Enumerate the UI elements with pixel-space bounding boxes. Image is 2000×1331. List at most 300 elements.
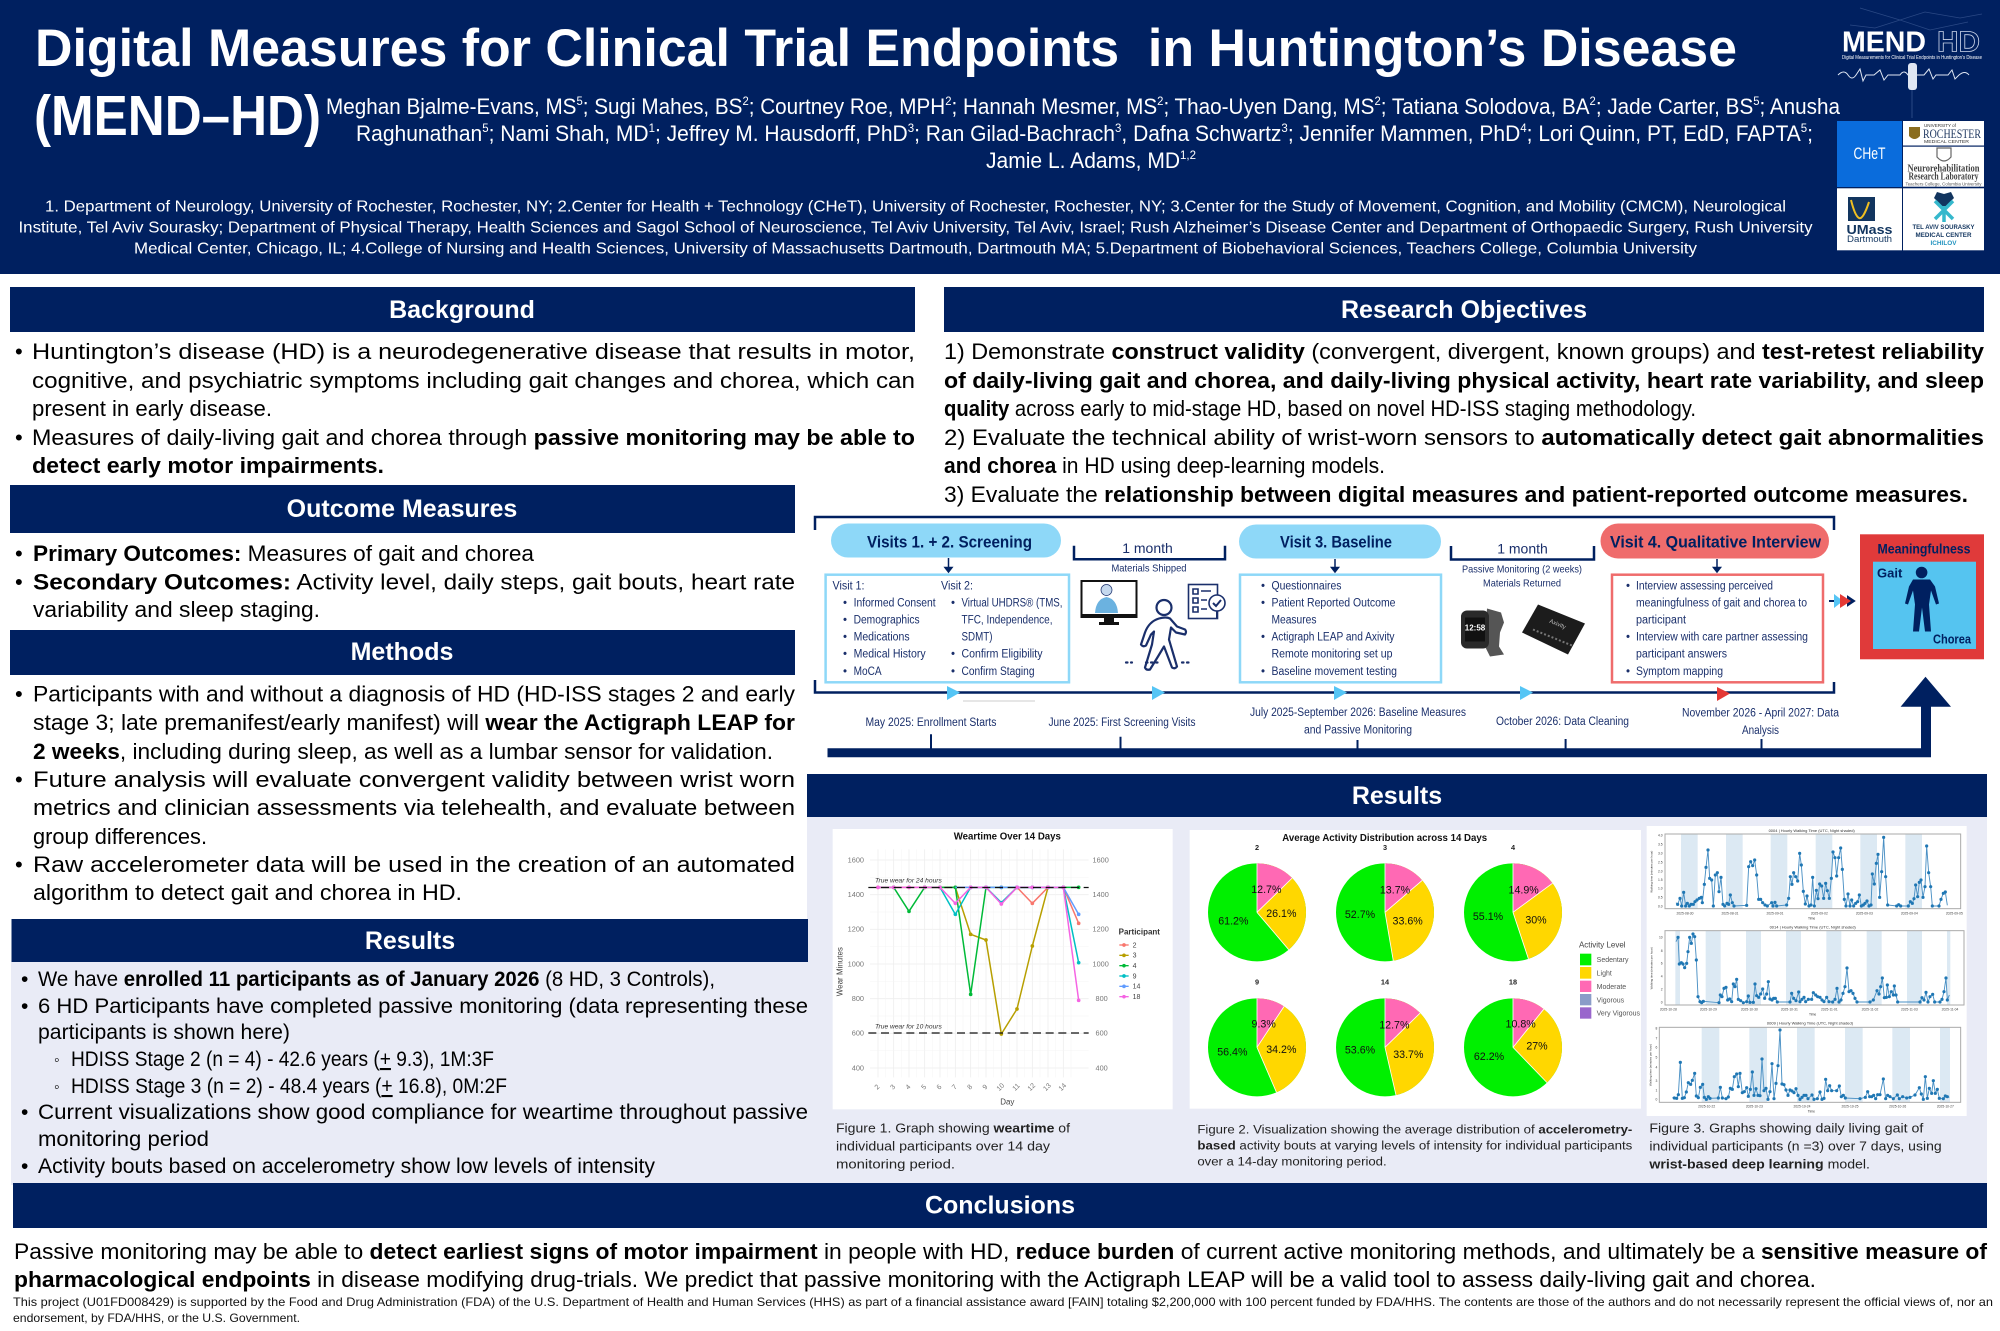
- text: conclusions: Passive monitoring may be able to detect earliest signs of motor impairment in people with HD, reduce burden of current active monitoring methods, and ultimately be a sensitive measure of: [14, 1239, 1988, 1264]
- figure 1 caption: monitoring period.: [836, 1157, 955, 1171]
- heading: results left: Results: [365, 927, 455, 955]
- box: visit 3 baseline: Actigraph LEAP and Axivity: [1272, 632, 1395, 644]
- box: visit 1 and visit 2: •: [843, 598, 847, 610]
- affiliations: 1. Department of Neurology, University of Rochester, Rochester, NY; 2.Center for Health + Technology (CHeT), University of Rochester, Rochester, NY; 3.Center for the Study of Movement, Cognition, and Mobility (CMCM), Neurological: [45, 198, 1786, 216]
- authors: 5: [482, 121, 489, 135]
- icon: Actigraph LEAP watch: [1461, 608, 1504, 656]
- authors: 3: [1281, 121, 1288, 135]
- box: visit 4 interview: •: [1626, 632, 1630, 644]
- box: meaningfulness: Chorea: [1933, 631, 1972, 646]
- box: visit 3 baseline: [1240, 575, 1441, 682]
- chart: participant 0014: 2025-11-03: [1901, 1007, 1918, 1011]
- chart: participant 0014: 10: [1659, 936, 1663, 940]
- chart: participant 0004: 2025-09-02: [1811, 912, 1828, 916]
- chart: participant 0009: 2025-10-23: [1746, 1104, 1763, 1108]
- text: results bullets: ◦: [54, 1079, 60, 1096]
- authors: ; Jade Carter, BS: [1596, 94, 1753, 119]
- figure 1: weartime line chart: 6: [936, 1084, 944, 1091]
- authors: ; Courtney Roe, MPH: [749, 94, 945, 119]
- box: visit 3 baseline: Questionnaires: [1272, 580, 1342, 592]
- authors: 2: [1374, 94, 1381, 108]
- text: objectives: quality across early to mid-stage HD, based on novel HD-ISS staging methodology.: [944, 396, 1696, 421]
- figure 1: weartime line chart: 1200: [1093, 925, 1109, 934]
- figure 1: weartime line chart: 2: [1133, 942, 1137, 949]
- text: objectives: 2) Evaluate the technical ability of wrist-worn sensors to automatically detect gait abnormalities: [944, 425, 1984, 450]
- box: visit 1 and visit 2: [826, 575, 1069, 682]
- chart: participant 0004: 1.0: [1658, 887, 1663, 891]
- footnote: funding: [13, 1295, 1993, 1325]
- pie percentage labels: 62.2%: [1474, 1051, 1505, 1063]
- chart: participant 0004: 0004 | Hourly Walking Time (UTC, Night shaded): [1769, 828, 1855, 833]
- heading: outcome measures: Outcome Measures: [287, 495, 517, 523]
- pie: participant 18: [1464, 998, 1562, 1096]
- chart: participant 0014: 0014 | Hourly Walking Time (UTC, Night shaded): [1770, 924, 1856, 929]
- down arrows: [945, 558, 1720, 572]
- text: results bullets: Activity bouts based on accelerometry show low levels of intensity: [38, 1155, 655, 1178]
- timeline dates: May 2025: Enrollment Starts: [866, 717, 997, 729]
- heading: results left: [12, 919, 808, 962]
- box: visit 3 baseline: Measures: [1272, 615, 1317, 627]
- pie percentage labels: [1217, 884, 1548, 1063]
- pie: participant 14: [1336, 998, 1434, 1096]
- box: visit 4 interview: meaningfulness of gait and chorea to: [1636, 598, 1807, 610]
- text: background bullets: detect early motor impairments.: [32, 453, 384, 478]
- authors: Jamie L. Adams, MD: [986, 148, 1189, 173]
- figure 1: weartime line chart: True wear for 10 hours: [875, 1023, 943, 1030]
- study timeline diagram: [815, 517, 1984, 757]
- chart: participant 0014: 2025-11-02: [1862, 1007, 1879, 1011]
- text: methods bullets: •: [15, 767, 23, 792]
- chart: participant 0009: 2025-10-26: [1889, 1104, 1906, 1108]
- figure 1: weartime line chart: 3: [889, 1084, 897, 1091]
- figure 1: weartime line chart: True wear for 24 hours: [875, 878, 943, 885]
- panel: results left: [12, 919, 808, 1178]
- box: visit 1 and visit 2: •: [843, 632, 847, 644]
- figure 1: weartime line chart: 1400: [848, 890, 864, 899]
- box: visit 3 baseline: •: [1261, 632, 1265, 644]
- figure 1: weartime line chart: 1000: [848, 959, 864, 968]
- text: results bullets: •: [21, 1101, 28, 1124]
- chart: participant 0009: 5: [1655, 1056, 1657, 1060]
- authors: Meghan Bjalme-Evans, MS: [326, 94, 593, 119]
- box: visit 1 and visit 2: •: [951, 666, 955, 678]
- bottom bar and up arrow: [828, 677, 1951, 757]
- bracket: 1 month passive monitoring: Passive Monitoring (2 weeks): [1462, 564, 1582, 576]
- pie legend: Activity Level: [1579, 940, 1626, 949]
- box: visit 1 and visit 2: Medications: [854, 632, 910, 644]
- pill: visit 4: Visit 4. Qualitative Interview: [1610, 533, 1822, 552]
- heading: conclusions: [13, 1183, 1987, 1228]
- pie percentage labels: 30%: [1525, 914, 1547, 926]
- figure 2 caption: over a 14-day monitoring period.: [1197, 1154, 1387, 1168]
- figure 1: weartime line chart: 14: [1133, 984, 1141, 991]
- footnote: funding: This project (U01FD008429) is supported by the Food and Drug Administration (FDA) of the U.S. Department of Health and Human Services (HHS) as part of a financial assistance award [FAIN] totaling $2,200,000 with 100 percent funded by FDA/HHS. The contents are those of the authors and do not necessarily represent the official views of, nor an: [13, 1295, 1993, 1309]
- authors: ; Nami Shah, MD: [489, 121, 649, 146]
- pill: visit 4: [1600, 524, 1829, 558]
- chart: participant 0004: 3.0: [1658, 852, 1663, 856]
- logo: Tel Aviv Sourasky Medical Center: [1903, 188, 1984, 250]
- chart: participant 0004: [1650, 828, 1963, 921]
- box: visit 1 and visit 2: Informed Consent: [854, 598, 936, 610]
- chart: participant 0009: Walking time (minutes per hour): [1648, 1044, 1652, 1086]
- heading: conclusions: Conclusions: [925, 1192, 1075, 1220]
- text: methods bullets: Future analysis will evaluate convergent validity between wrist worn: [33, 767, 795, 792]
- chart: participant 0009: 8: [1655, 1026, 1657, 1030]
- figure 1 caption: individual participants over 14 day: [836, 1140, 1051, 1154]
- box: visit 4 interview: [1612, 575, 1823, 682]
- chart: participant 0009: 0009 | Hourly Walking Time (UTC, Night shaded): [1767, 1021, 1854, 1026]
- box: visit 1 and visit 2: •: [951, 649, 955, 661]
- text: results bullets: •: [21, 968, 28, 991]
- authors: 3: [1115, 121, 1122, 135]
- heading: research objectives: Research Objectives: [1341, 296, 1587, 324]
- authors: 2: [1590, 94, 1596, 108]
- text: results bullets: monitoring period: [38, 1128, 209, 1151]
- box: visit 3 baseline: Patient Reported Outcome: [1272, 598, 1396, 610]
- bracket: 1 month materials shipped: 1 month: [1122, 540, 1173, 556]
- icon: telehealth monitor: [1081, 581, 1137, 625]
- authors: ; Jeffrey M. Hausdorff, PhD: [655, 121, 908, 146]
- text: background bullets: •: [15, 425, 23, 450]
- logo: Tel Aviv Sourasky Medical Center: TEL AVIV SOURASKY: [1912, 224, 1975, 231]
- heading: background: Background: [389, 296, 535, 324]
- text: background bullets: [15, 339, 915, 478]
- box: visit 1 and visit 2: Visit 2:: [941, 580, 973, 592]
- text: outcomes: Primary Outcomes: Measures of gait and chorea: [33, 541, 535, 566]
- pie percentage labels: 33.7%: [1393, 1049, 1424, 1061]
- figure 2 caption: Figure 2. Visualization showing the average distribution of accelerometry-: [1197, 1122, 1632, 1136]
- box: meaningfulness: [1860, 534, 1984, 659]
- authors: ;: [1807, 121, 1813, 146]
- text: results bullets: [21, 968, 808, 1178]
- affiliations: Medical Center, Chicago, IL; 4.College of Nursing and Health Sciences, University of Massachusetts Dartmouth, Dartmouth MA; 5.Department of Biobehavioral Sciences, Teachers College, Columbia University: [134, 240, 1697, 258]
- timeline dates: October 2026: Data Cleaning: [1496, 716, 1629, 728]
- icon: standing person: [1905, 567, 1939, 632]
- figure 2: activity pie charts: 9: [1255, 978, 1259, 987]
- chart: participant 0009: 1: [1655, 1089, 1657, 1093]
- figure 3 caption: individual participants (n =3) over 7 days, using: [1649, 1140, 1942, 1154]
- text: methods bullets: algorithm to detect gait and chorea in HD.: [33, 880, 462, 905]
- authors: 5: [1753, 94, 1760, 108]
- authors: ; Ran Gilad-Bachrach: [914, 121, 1115, 146]
- pie: participant 3: [1336, 863, 1434, 961]
- pie percentage labels: 9.3%: [1252, 1018, 1276, 1030]
- affiliations: [18, 198, 1813, 258]
- figure 1: weartime line chart: Weartime Over 14 Days: [954, 832, 1061, 843]
- heading: methods: Methods: [351, 638, 453, 666]
- chart: participant 0004: 0.5: [1658, 896, 1663, 900]
- heading: background: [10, 287, 915, 332]
- logo: UMass Dartmouth: [1837, 188, 1902, 250]
- box: visit 1 and visit 2: TFC, Independence,: [962, 615, 1052, 627]
- box: visit 1 and visit 2: Confirm Eligibility: [962, 649, 1043, 661]
- figure 1: weartime line chart: 800: [1096, 994, 1108, 1003]
- figure 1: weartime line chart: 1400: [1093, 890, 1109, 899]
- pill: visit 3: [1239, 524, 1441, 558]
- box: visit 1 and visit 2: MoCA: [854, 666, 882, 678]
- chart: participant 0004: 1.5: [1658, 878, 1663, 882]
- figure 1: weartime line chart: 4: [1133, 963, 1137, 970]
- text: conclusions: pharmacological endpoints in disease modifying drug-trials. We predict that passive monitoring with the Actigraph LEAP will be a valid tool to assess daily-living gait and chorea.: [14, 1267, 1816, 1292]
- timeline dates: November 2026 - April 2027: Data: [1682, 708, 1840, 720]
- figure 1: weartime line chart: 2: [874, 1084, 882, 1091]
- pie percentage labels: 26.1%: [1266, 908, 1297, 920]
- text: conclusions: [14, 1239, 1988, 1292]
- figure 1: weartime line chart: 9: [1133, 973, 1137, 980]
- icon: checklist with magnifier: [1188, 584, 1225, 619]
- chart: participant 0009: 4: [1655, 1066, 1657, 1070]
- text: objectives: and chorea in HD using deep-learning models.: [944, 453, 1385, 478]
- figure 1 caption: [836, 1122, 1071, 1171]
- text: outcomes: Secondary Outcomes: Activity level, daily steps, gait bouts, heart rate: [33, 570, 795, 594]
- box: visit 1 and visit 2: Visit 1:: [832, 580, 864, 592]
- panel: conclusions: [13, 1183, 1988, 1292]
- authors: 1,2: [1180, 148, 1196, 162]
- logo: Neurorehabilitation Research Laboratory: Teachers College, Columbia University: [1906, 182, 1982, 186]
- pie percentage labels: 33.6%: [1393, 915, 1423, 927]
- text: background bullets: •: [15, 339, 23, 364]
- figure 1: weartime line chart: 4: [905, 1084, 913, 1091]
- box: visit 1 and visit 2: SDMT): [962, 632, 993, 644]
- logo: Neurorehabilitation Research Laboratory: Neurorehabilitation: [1908, 164, 1980, 174]
- pie percentage labels: 13.7%: [1380, 884, 1411, 896]
- authors: ; Lori Quinn, PT, EdD, FAPTA: [1527, 121, 1801, 146]
- timeline dates: June 2025: First Screening Visits: [1048, 717, 1196, 729]
- chart: participant 0004: 2025-08-30: [1676, 912, 1694, 916]
- pie percentage labels: 14.9%: [1509, 885, 1539, 897]
- logo: UMass Dartmouth: UMass: [1846, 222, 1892, 237]
- figure 1: weartime line chart: 1000: [1093, 959, 1109, 968]
- authors: 2: [1157, 94, 1164, 108]
- chart: participant 0014: 2: [1661, 988, 1663, 992]
- text: outcomes: •: [15, 570, 23, 594]
- text: results bullets: •: [21, 1155, 28, 1178]
- logo: Tel Aviv Sourasky Medical Center: MEDICAL CENTER: [1916, 232, 1972, 239]
- figure 1: weartime line chart: 1200: [848, 925, 864, 934]
- chart: participant 0009: 7: [1655, 1037, 1657, 1041]
- pie legend: Sedentary: [1597, 957, 1629, 964]
- pie percentage labels: 10.8%: [1506, 1018, 1536, 1030]
- box: visit 4 interview: Symptom mapping: [1636, 666, 1723, 678]
- panel: results right heading: Results: [1352, 782, 1442, 810]
- box: visit 4 interview: Interview with care partner assessing: [1636, 632, 1808, 644]
- logo: MEND HD: HD: [1937, 26, 1980, 58]
- pie percentage labels: 27%: [1526, 1041, 1548, 1053]
- chart: participant 0004: 2025-09-04: [1901, 912, 1918, 916]
- box: visit 3 baseline: Remote monitoring set up: [1272, 649, 1392, 661]
- figure 3 caption: wrist-based deep learning model.: [1648, 1157, 1870, 1171]
- chart: participant 0014: 8: [1661, 949, 1663, 953]
- box: visit 1 and visit 2: Demographics: [854, 615, 920, 627]
- chart: participant 0009: 0: [1655, 1098, 1657, 1102]
- chart: participant 0004: 4.0: [1658, 834, 1663, 838]
- header band: [0, 0, 2000, 274]
- pie percentage labels: 56.4%: [1217, 1047, 1248, 1059]
- figure 2: activity pie charts: 2: [1255, 843, 1259, 852]
- timeline dates: Analysis: [1742, 725, 1779, 737]
- bracket: 1 month passive monitoring: [1451, 540, 1594, 590]
- bracket: 1 month passive monitoring: 1 month: [1497, 540, 1548, 556]
- figure 2: activity pie charts: 18: [1509, 978, 1517, 987]
- text: methods bullets: •: [15, 852, 23, 877]
- figure 1: weartime line chart: 11: [1012, 1082, 1022, 1093]
- chart: participant 0014: 2025-10-28: [1660, 1007, 1677, 1011]
- authors: 5: [1801, 121, 1807, 135]
- icon: Axivity sensor: [1522, 604, 1585, 654]
- figure 3 caption: Figure 3. Graphs showing daily living gait of: [1649, 1122, 1924, 1136]
- text: results bullets: •: [21, 995, 28, 1018]
- text: methods bullets: Raw accelerometer data will be used in the creation of an automated: [33, 852, 795, 877]
- chart: participant 0014: [1650, 924, 1964, 1017]
- text: results bullets: ◦: [54, 1052, 60, 1069]
- chart: participant 0009: Time: [1808, 1110, 1815, 1114]
- pie legend: Light: [1597, 971, 1612, 978]
- chart: participant 0004: 2.5: [1658, 860, 1663, 864]
- figure 2: activity pie charts: Average Activity Distribution across 14 Days: [1282, 833, 1487, 844]
- box: visit 1 and visit 2: •: [951, 598, 955, 610]
- authors: 5: [576, 94, 583, 108]
- text: methods bullets: Participants with and without a diagnosis of HD (HD-ISS stages 2 and early: [33, 682, 795, 706]
- chart: participant 0004: 2025-09-01: [1766, 912, 1784, 916]
- box: meaningfulness: Meaningfulness: [1878, 541, 1970, 556]
- figure 1: weartime line chart: 600: [1096, 1029, 1108, 1038]
- chart: participant 0004: 3.5: [1658, 843, 1663, 847]
- text: background bullets: cognitive, and psychiatric symptoms including gait changes and chorea, which can: [32, 368, 915, 393]
- authors: ; Jennifer Mammen, PhD: [1288, 121, 1520, 146]
- box: visit 3 baseline: •: [1261, 598, 1265, 610]
- figure 2: activity pie charts: 3: [1383, 843, 1387, 852]
- chart: participant 0009: 2025-10-27: [1937, 1104, 1954, 1108]
- timeline arrowheads: [947, 686, 1730, 701]
- chart: participant 0009: 3: [1655, 1079, 1657, 1083]
- arrow: to meaningfulness: [1829, 594, 1854, 608]
- logo: MEND HD: Digital Measurements for Clinical Trial Endpoints in Huntington’s Disease: [1842, 55, 1982, 61]
- box: visit 4 interview: •: [1626, 666, 1630, 678]
- chart: participant 0009: 2025-10-25: [1841, 1104, 1859, 1108]
- logo: Neurorehabilitation Research Laboratory: [1903, 147, 1984, 187]
- figure 1: weartime line chart: 9: [982, 1084, 990, 1091]
- authors: , Dafna Schwartz: [1121, 121, 1281, 146]
- text: background bullets: present in early disease.: [32, 396, 272, 421]
- panel: methods: [10, 630, 795, 905]
- panel: outcome measures: [10, 485, 795, 622]
- timeline dates: July 2025-September 2026: Baseline Measures: [1250, 707, 1466, 719]
- heading: outcome measures: [10, 485, 795, 533]
- authors: ; Hannah Mesmer, MS: [951, 94, 1157, 119]
- figure 2: activity pie charts: [1190, 830, 1641, 1109]
- text: methods bullets: •: [15, 682, 23, 706]
- text: objectives: [944, 339, 1985, 507]
- text: objectives: 1) Demonstrate construct validity (convergent, divergent, known groups) and test-retest reliability: [944, 339, 1985, 364]
- chart: participant 0014: 2025-11-01: [1821, 1007, 1838, 1011]
- chart: participant 0009: 2025-10-24: [1793, 1104, 1811, 1108]
- figure 1: weartime line chart: 800: [852, 994, 864, 1003]
- pie: participant 4: [1464, 863, 1562, 961]
- logo: UMass Dartmouth: Dartmouth: [1847, 234, 1892, 244]
- logo: MEND HD: [1838, 8, 1982, 118]
- text: methods bullets: metrics and clinician assessments via telehealth, and evaluate between: [33, 795, 795, 820]
- text: results bullets: We have enrolled 11 participants as of January 2026 (8 HD, 3 Controls),: [38, 968, 715, 991]
- logo: University of Rochester: [1903, 121, 1984, 146]
- icon: Axivity sensor: Axivity: [1548, 619, 1567, 631]
- box: visit 3 baseline: Baseline movement testing: [1272, 666, 1397, 678]
- pie percentage labels: 53.6%: [1345, 1045, 1376, 1057]
- text: methods bullets: 2 weeks, including during sleep, as well as a lumbar sensor for validation.: [33, 739, 773, 764]
- pie percentage labels: 55.1%: [1473, 911, 1504, 923]
- pie legend: Very Vigorous: [1597, 1011, 1641, 1018]
- box: meaningfulness: Gait: [1877, 566, 1903, 581]
- authors: 4: [1520, 121, 1527, 135]
- text: background bullets: Measures of daily-living gait and chorea through passive monitoring may be able to: [32, 425, 915, 450]
- text: background bullets: Huntington’s disease (HD) is a neurodegenerative disease that results in motor,: [32, 339, 915, 364]
- chart: participant 0004: 2.0: [1658, 869, 1663, 873]
- authors: 3: [908, 121, 914, 135]
- authors: ; Sugi Mahes, BS: [583, 94, 742, 119]
- authors: [326, 94, 1841, 173]
- box: visit 1 and visit 2: Confirm Staging: [962, 666, 1034, 678]
- pie: participant 2: [1208, 863, 1306, 961]
- chart: participant 0014: Time: [1809, 1013, 1816, 1017]
- text: results bullets: 6 HD Participants have completed passive monitoring (data representing these: [38, 995, 808, 1018]
- panel: research objectives: [944, 287, 1985, 507]
- box: visit 4 interview: Interview assessing perceived: [1636, 580, 1773, 592]
- timeline dates: [866, 707, 1840, 737]
- text: methods bullets: group differences.: [33, 824, 207, 849]
- pie percentage labels: 34.2%: [1266, 1044, 1297, 1056]
- figure 1: weartime line chart: Participant: [1119, 928, 1160, 937]
- text: results bullets: HDISS Stage 2 (n = 4) - 42.6 years (+ 9.3), 1M:3F: [71, 1048, 494, 1071]
- panel: results right heading: [807, 774, 1987, 817]
- authors: ; Anusha: [1760, 94, 1841, 119]
- chart: participant 0014: Walking time (minutes per hour): [1650, 947, 1654, 989]
- chart: participant 0009: 2025-10-22: [1698, 1104, 1715, 1108]
- icon: walking person: [1126, 600, 1190, 670]
- figure 1: weartime line chart: 1600: [1093, 855, 1109, 864]
- logo: CHeT: CHeT: [1854, 144, 1886, 163]
- icon: Actigraph LEAP watch: 12:58: [1465, 624, 1486, 632]
- bracket: 1 month materials shipped: Materials Shipped: [1112, 563, 1187, 575]
- figure 1: weartime line chart: 18: [1133, 994, 1141, 1001]
- chart: participant 0009: 6: [1655, 1046, 1657, 1050]
- text: results bullets: Current visualizations show good compliance for weartime throughout passive: [38, 1101, 808, 1124]
- panel: results background: [11, 817, 1987, 1185]
- chart: participant 0014: 2025-11-04: [1942, 1007, 1959, 1011]
- chart: participant 0014: 4: [1661, 975, 1663, 979]
- chart: participant 0004: 2025-09-05: [1946, 912, 1963, 916]
- chart: participant 0004: 2025-09-03: [1856, 912, 1873, 916]
- figure 1: weartime line chart: 12: [1027, 1082, 1037, 1093]
- box: visit 1 and visit 2: Virtual UHDRS® (TMS,: [962, 598, 1062, 610]
- figure 1: weartime line chart: 10: [996, 1082, 1006, 1093]
- box: visit 4 interview: participant answers: [1636, 649, 1727, 661]
- chart: participant 0014: 2025-10-30: [1741, 1007, 1758, 1011]
- logo: University of Rochester: ROCHESTER: [1923, 126, 1981, 141]
- pie percentage labels: 12.7%: [1251, 884, 1282, 896]
- logo: University of Rochester: UNIVERSITY of: [1924, 123, 1957, 128]
- figure 1: weartime line chart: 5: [920, 1084, 928, 1091]
- figure 1: weartime line chart: [833, 829, 1173, 1109]
- authors: ; Thao-Uyen Dang, MS: [1163, 94, 1374, 119]
- figure 1: weartime line chart: 400: [852, 1063, 864, 1072]
- figure 1: weartime line chart: 1600: [848, 855, 864, 864]
- pie percentage labels: 52.7%: [1345, 909, 1376, 921]
- text: objectives: 3) Evaluate the relationship between digital measures and patient-reported outcome measures.: [944, 482, 1968, 507]
- box: visit 3 baseline: •: [1261, 580, 1265, 592]
- figure 1 caption: Figure 1. Graph showing weartime of: [836, 1122, 1071, 1136]
- pie legend: Vigorous: [1597, 997, 1625, 1004]
- chart: participant 0014: 6: [1661, 962, 1663, 966]
- chart: participant 0004: 2025-08-31: [1721, 912, 1739, 916]
